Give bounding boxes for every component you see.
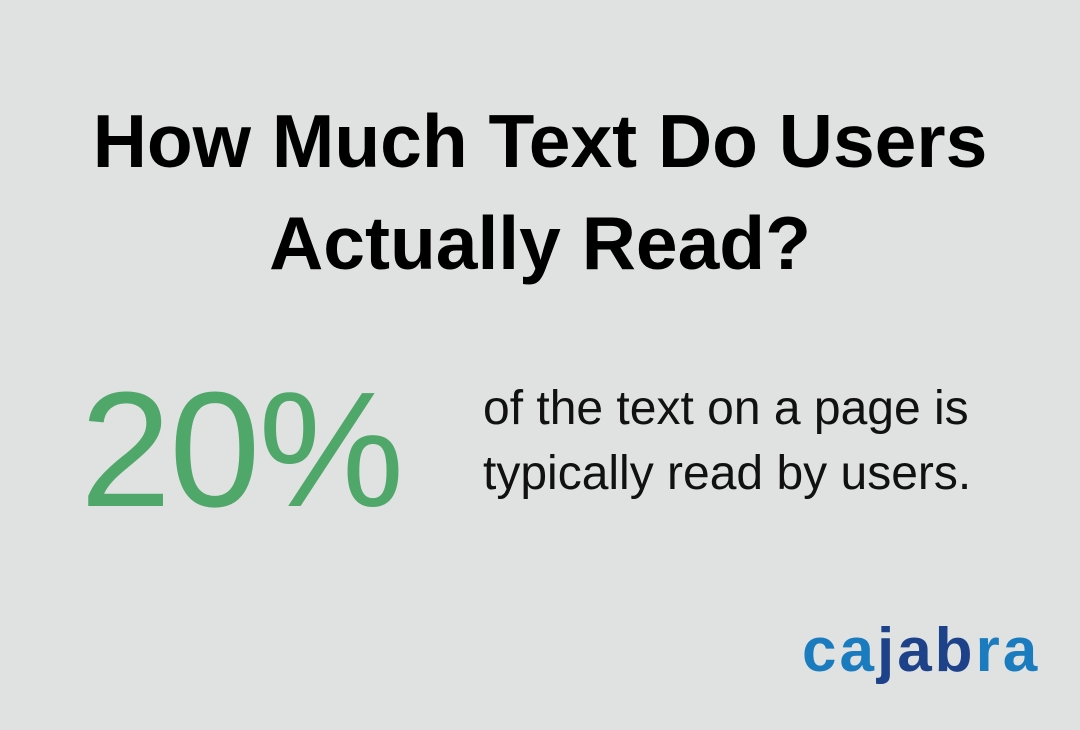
logo: cajabra: cajabra [802, 616, 1040, 685]
description text: typically read by users. [483, 447, 971, 500]
title: Actually Read? [269, 201, 811, 285]
title: How Much Text Do Users [93, 99, 987, 183]
title [93, 99, 987, 285]
description text [483, 382, 971, 500]
description text: of the text on a page is [483, 382, 969, 435]
stat: 20%: 20% [80, 358, 402, 541]
